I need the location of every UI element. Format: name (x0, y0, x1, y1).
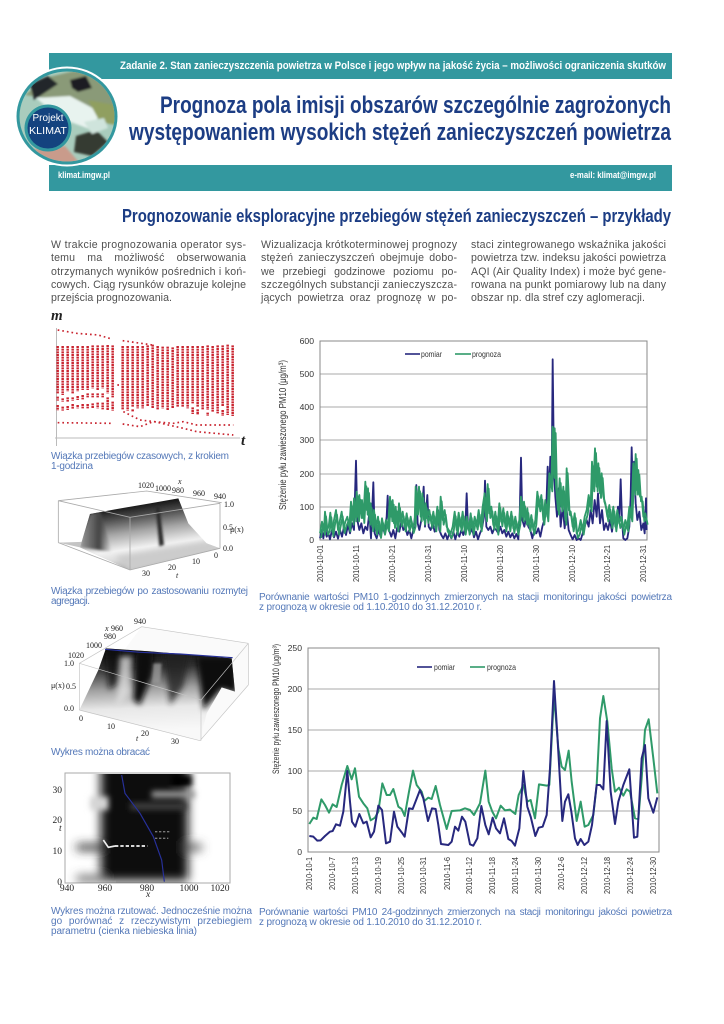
intro text column 1: otrzymanych wyników pośrednich i koń- (51, 266, 246, 278)
x axis labels: 2010-11-30 (531, 545, 541, 582)
axis labels: 960 (193, 489, 205, 498)
line chart: PM10 daily (271, 643, 659, 894)
axis labels: 0.0 (223, 544, 233, 553)
caption: time series bundle: 1-godzina (51, 461, 93, 472)
chart: 3D surface after fuzzy aggregation (58, 477, 244, 580)
intro text column 2: jących powietrza oraz prognozę w po- (260, 292, 457, 304)
x axis labels: 2010-11-18 (487, 857, 497, 894)
caption: projection: Wykres można rzutować. Jednocześnie można (51, 906, 252, 917)
x axis labels (315, 545, 648, 582)
website: klimat.imgw.pl (58, 170, 110, 180)
axis labels: 1020 (138, 481, 154, 490)
x axis labels: 2010-12-30 (648, 857, 658, 894)
intro text column 3 (471, 239, 667, 304)
caption: rotate: Wykres można obracać (51, 747, 150, 758)
axis labels: 10 (52, 847, 62, 857)
y axis labels: 100 (288, 766, 302, 776)
intro text column 2: stężeń zanieczyszczeń obejmuje dobo- (261, 252, 457, 264)
y axis labels: 600 (300, 336, 314, 346)
axis labels: 1000 (155, 484, 171, 493)
y axis title: Stężenie pyłu zawieszonego PM10 (μg/m³) (278, 360, 289, 510)
axis labels: 1020 (68, 651, 84, 660)
x axis labels: 2010-12-12 (579, 857, 589, 894)
y axis labels: 150 (288, 725, 302, 735)
caption: daily comparison: Porównanie wartości PM10 24-godzinnych zmierzonych na stacji monitoringu jakości powietrza (259, 907, 672, 918)
x axis labels: 2010-11-10 (459, 545, 469, 582)
axis labels: 960 (98, 884, 112, 894)
axis labels: t (136, 734, 139, 743)
caption: hourly comparison (259, 592, 672, 613)
caption: time series bundle (51, 451, 229, 472)
x axis labels: 2010-12-10 (567, 545, 577, 582)
footer bar: links (49, 165, 672, 191)
legend (417, 662, 516, 672)
y axis labels (300, 336, 314, 545)
axis labels: 30 (171, 737, 179, 746)
x axis labels: 2010-10-31 (418, 857, 428, 894)
intro text column 2 (260, 239, 458, 304)
intro text column 1: cowych. Ciąg rysunków obrazuje kolejne (51, 279, 246, 291)
axis labels: x (145, 890, 151, 900)
intro text column 1: przejścia prognozowania. (51, 292, 172, 304)
caption: fuzzy aggregation (51, 586, 248, 607)
x axis labels: 2010-12-24 (625, 857, 635, 894)
actual parameter line (122, 775, 164, 882)
axis labels: 0.5 (66, 682, 76, 691)
intro text column 3: AQI (Air Quality Index) i może być gene- (471, 266, 666, 278)
axis labels: 980 (104, 632, 116, 641)
axis labels: 20 (52, 816, 62, 826)
intro text column 3: obszar np. dla stref czy aglomeracji. (471, 292, 645, 304)
y axis labels: 400 (300, 402, 314, 412)
legend: pomiar (421, 349, 442, 359)
x axis labels: 2010-11-20 (495, 545, 505, 582)
y axis labels: 50 (292, 806, 302, 816)
axis labels: 980 (172, 486, 184, 495)
surface (80, 648, 235, 722)
axis labels: 960 (111, 624, 123, 633)
y axis labels (288, 643, 302, 857)
intro text column 1 (51, 239, 246, 304)
x axis labels: 2010-11-12 (464, 857, 474, 894)
logo: Projekt KLIMAT satellite badge (14, 65, 120, 170)
axis labels (52, 786, 230, 900)
logo text (29, 113, 67, 137)
intro text column 1: W trakcie prognozowania operator sys- (51, 239, 246, 251)
axis labels: 1020 (210, 884, 230, 894)
axis labels: t (176, 571, 179, 580)
caption: projection: go porównać z rzeczywistym przebiegiem (51, 916, 252, 927)
caption: daily comparison: z prognozą w okresie od 1.10.2010 do 31.12.2010 r. (259, 917, 482, 928)
x axis labels: 2010-10-25 (396, 857, 406, 894)
axis labels: 10 (107, 722, 115, 731)
x axis labels: 2010-12-6 (556, 857, 566, 890)
axis labels (138, 477, 244, 580)
series: prognoza hourly (320, 427, 648, 538)
axis labels: x (104, 624, 109, 633)
axis labels: x (177, 477, 182, 486)
legend: pomiar (434, 662, 455, 672)
surface (58, 498, 220, 573)
caption: projection: parametru (cienka niebieska linia) (51, 926, 197, 937)
intro text column 1: temu ma możliwość obserwowania (51, 252, 246, 264)
series: prognoza daily (309, 695, 657, 829)
email: e-mail: klimat@imgw.pl (570, 170, 656, 180)
axis labels: 0.0 (64, 704, 74, 713)
x axis labels: 2010-11-30 (533, 857, 543, 894)
axis labels: 20 (168, 563, 176, 572)
axis labels: 1.0 (64, 659, 74, 668)
legend: prognoza (487, 662, 516, 672)
chart: rotated 3D surface (51, 617, 248, 746)
caption: time series bundle: Wiązka przebiegów czasowych, z krokiem (51, 451, 229, 462)
axis labels: 1000 (86, 641, 102, 650)
axis labels: 0.5 (223, 523, 233, 532)
axis labels: 940 (60, 884, 74, 894)
logo text: Projekt (32, 113, 64, 124)
x axis labels: 2010-10-13 (350, 857, 360, 894)
main title (128, 92, 672, 146)
y axis labels: 500 (300, 369, 314, 379)
x axis labels: 2010-10-01 (315, 545, 325, 582)
caption: fuzzy aggregation: agregacji. (51, 596, 90, 607)
caption: fuzzy aggregation: Wiązka przebiegów po zastosowaniu rozmytej (51, 586, 248, 597)
x axis labels: 2010-12-31 (638, 545, 648, 582)
caption: hourly comparison: Porównanie wartości PM10 1-godzinnych zmierzonych na stacji monitoringu jakości powietrza (259, 592, 672, 603)
intro text column 3: staci zintegrowanego wskaźnika jakości (471, 239, 666, 251)
axis labels: 980 (140, 884, 154, 894)
intro text column 3: rowana na punkt pomiarowy lub na dany (471, 279, 667, 291)
axis labels: μ(x) (230, 525, 244, 534)
axis labels: 1.0 (224, 500, 234, 509)
axis labels: 0 (57, 878, 62, 888)
legend: prognoza (472, 349, 501, 359)
y axis title: Stężenie pyłu zawieszonego PM10 (μg/m³) (271, 644, 282, 774)
intro text column 2: we przebiegi godzinowe poziomu po- (260, 266, 457, 278)
axis labels: 10 (192, 557, 200, 566)
x axis labels: 2010-10-1 (304, 857, 314, 890)
x axis labels: 2010-10-21 (387, 545, 397, 582)
axis labels: 1000 (180, 884, 199, 894)
y axis labels: 0 (309, 535, 314, 545)
y axis labels: 250 (288, 643, 302, 653)
axis labels: 30 (52, 786, 62, 796)
axis labels: μ(x) (51, 681, 65, 690)
axis labels: 30 (142, 569, 150, 578)
chart: heatmap projection (52, 772, 230, 897)
intro text column 2: Wizualizacja krótkoterminowej prognozy (261, 239, 458, 251)
actual parameter line (105, 649, 233, 658)
x axis labels: 2010-11-6 (442, 857, 452, 890)
axis labels: 940 (134, 617, 146, 626)
axis labels: 940 (214, 492, 226, 501)
series: pomiar daily (309, 681, 657, 846)
x axis labels (304, 857, 658, 894)
axis m label: m (51, 308, 63, 324)
axis labels: 20 (141, 729, 149, 738)
axis labels: 0 (214, 551, 218, 560)
logo text: KLIMAT (29, 126, 67, 137)
header bar: task title (49, 53, 672, 79)
x axis labels: 2010-10-7 (327, 857, 337, 890)
intro text column 2: szczególnych substancji zanieczyszcza- (261, 279, 457, 291)
x axis labels: 2010-10-19 (373, 857, 383, 894)
x axis labels: 2010-11-24 (510, 857, 520, 894)
y axis labels: 0 (297, 847, 302, 857)
line chart: PM10 hourly (278, 336, 648, 582)
legend (405, 349, 501, 359)
axis labels: 0 (79, 714, 83, 723)
y axis labels: 100 (300, 502, 314, 512)
y axis labels: 200 (288, 684, 302, 694)
intro text column 3: powietrza tzw. indeksu jakości powietrza (471, 252, 666, 264)
caption: projection (51, 906, 252, 937)
axis t label: t (241, 433, 246, 449)
chart: red scatter of time-series bundle (51, 308, 246, 449)
caption: hourly comparison: z prognozą w okresie od 1.10.2010 do 31.12.2010 r. (259, 602, 482, 613)
caption: daily comparison (259, 907, 672, 928)
axis labels: t (59, 824, 62, 834)
series: pomiar hourly (320, 359, 647, 540)
x axis labels: 2010-10-31 (423, 545, 433, 582)
axis labels (51, 617, 179, 746)
y axis labels: 200 (300, 469, 314, 479)
x axis labels: 2010-12-18 (602, 857, 612, 894)
x axis labels: 2010-10-11 (351, 545, 361, 582)
x axis labels: 2010-12-21 (602, 545, 612, 582)
y axis labels: 300 (300, 435, 314, 445)
